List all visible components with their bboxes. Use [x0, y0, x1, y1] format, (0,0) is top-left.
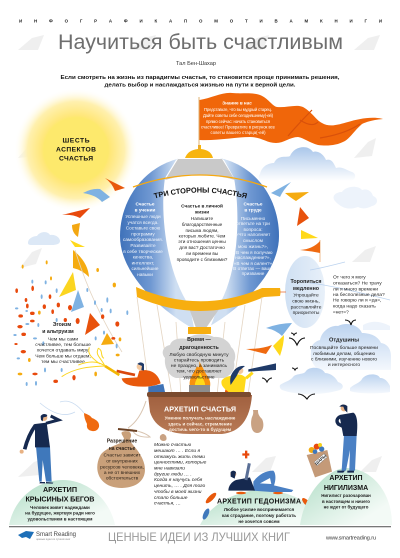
italic quote: мне навязали — [154, 466, 185, 472]
hill: nihilism: Нигилист разочарован — [321, 493, 371, 498]
person: hedonist — [228, 451, 293, 492]
cloud: outlets: Посвящайте больше времени — [310, 344, 378, 351]
hill: nihilism: НИГИЛИЗМА — [324, 485, 368, 492]
sack: permission to be happy: от внутренних — [106, 460, 138, 464]
text: egoism and altruism — [35, 322, 91, 365]
questions text: отказаться? Не трачу — [333, 280, 382, 286]
italic quote: ценностями, которые — [154, 461, 207, 466]
ropes — [75, 250, 262, 395]
column: study: в учении — [135, 208, 155, 212]
logo text — [36, 531, 76, 541]
column: work: «В чем я силен?» — [234, 261, 273, 266]
italic quote: ценить, … . Для того — [154, 483, 206, 489]
column: personal life: Счастье в личной — [181, 202, 223, 208]
column: work: «Что наполняет — [236, 232, 271, 237]
birds — [262, 320, 356, 399]
hill: rat race — [9, 480, 115, 525]
hill: nihilism: АРХЕТИП — [329, 475, 363, 482]
column: work — [233, 202, 273, 276]
text: egoism and altruism: Эгоизм — [53, 322, 71, 328]
questions text: когда надо сказать — [333, 304, 376, 310]
gray cloud: time is precious: Время — — [187, 337, 212, 343]
sack: permission to be happy: ресурсов человека, — [100, 466, 144, 470]
italic quote: счастья, … — [154, 502, 181, 507]
basket: archetype of happiness: здесь и сейчас, стремление — [168, 420, 232, 426]
column: work: Письменно — [241, 216, 266, 221]
column: personal life: эти отношения ценны — [178, 239, 226, 244]
basket: archetype of happiness: Умение получать наслаждение — [165, 416, 236, 420]
column: work: смыслом — [243, 238, 263, 243]
italic quote: Можно счастью — [154, 442, 191, 448]
author: Тал Бен-Шахар — [176, 61, 216, 67]
sun: six aspects — [14, 88, 138, 212]
column: personal life — [177, 202, 228, 262]
top label: И Н Ф О Г Р А Ф И К А П О М О Т И В А М К Н И Г И — [19, 18, 382, 24]
column: work: В ответах — ваше — [233, 266, 273, 271]
gray cloud: time is precious — [163, 334, 235, 397]
small flags and ellipse: hurry slowly — [246, 240, 390, 356]
column: work: в труде — [244, 208, 262, 212]
box with balls: ШАРЫ — [314, 453, 327, 466]
sack: permission to be happy: Счастье зависит — [103, 452, 141, 458]
hill: rat race: на будущее, жертвуя ради него — [25, 510, 95, 516]
column: personal life: письма людям, — [185, 228, 219, 233]
column: work: ответьте на три — [236, 221, 270, 226]
title: Научиться быть счастливым — [58, 30, 343, 54]
hill: hedonism: как страдание, поэтому работать — [222, 512, 296, 518]
text: egoism and altruism: Чем мы сами — [48, 336, 78, 342]
logo icon — [18, 531, 34, 539]
column: personal life: ли времени вы — [186, 251, 219, 256]
burner — [189, 385, 210, 397]
italic quote: другие люди … . — [154, 471, 192, 477]
person with telescope — [221, 363, 276, 397]
column: study: Составьте свою — [126, 226, 161, 231]
hill: rat race: удовольствием в настоящем — [28, 516, 93, 522]
column: study: учатся всегда. — [127, 220, 159, 225]
cloud: outlets: с близкими, изучению нового — [311, 356, 377, 362]
column: work: наслаждение?», — [235, 255, 271, 260]
column: personal life: для вас? Достаточно — [179, 245, 225, 250]
column: study: Развивайте — [130, 242, 156, 248]
gray cloud: time is precious: тем, что доставляет — [176, 370, 223, 374]
italic quote: Когда я научусь себя — [154, 477, 203, 483]
questions text: на бесполезные дела? — [333, 292, 385, 298]
text: egoism and altruism: счастливее, тем больше — [35, 342, 91, 348]
balloon band — [136, 287, 280, 311]
footer url: www.smartreading.ru — [325, 536, 376, 542]
intro text — [60, 75, 340, 88]
basket: archetype of happiness — [147, 392, 263, 441]
questions text: Не говорю ли я «да», — [333, 298, 381, 304]
column: personal life: которых любите. Чем — [179, 234, 225, 239]
hill: rat race: АРХЕТИП — [43, 485, 77, 494]
italic quote: чтобы в моей жизни — [154, 488, 202, 495]
hill: nihilism: в настоящем и ничего — [322, 499, 370, 504]
column: personal life: благодарственные — [182, 222, 223, 227]
italic quote: мешают … . Если я — [154, 448, 200, 454]
flag: knowledge within: Представьте, что вы мудрый старец. — [204, 107, 272, 112]
cloud: outlets — [280, 322, 391, 394]
logo text: ценные идеи из лучших книг — [36, 538, 70, 541]
sack: permission to be happy: Разрешение — [107, 438, 137, 444]
column: study — [123, 202, 163, 277]
balloon envelope — [120, 156, 279, 328]
questions text: От чего я могу — [333, 274, 366, 280]
sack: permission to be happy: обстоятельств — [106, 476, 139, 482]
text: egoism and altruism: Чем больше мы отдаем, — [35, 354, 91, 360]
column: study: интеллект, — [132, 260, 154, 265]
column: study: Успешные люди — [125, 214, 161, 219]
hill: hedonism — [200, 490, 327, 525]
clouds upper — [28, 147, 377, 245]
intro text: делать выбор и наслаждаться жизнью на пути к верной цели. — [104, 82, 296, 88]
column: study: Счастье — [135, 202, 155, 206]
party popper streamers — [62, 347, 105, 377]
small flags and ellipse: hurry slowly: медленно — [293, 286, 320, 292]
balloon heading: ТРИ СТОРОНЫ СЧАСТЬЯ — [154, 187, 248, 198]
person with party popper — [105, 362, 166, 397]
hill: hedonism: Любое усилие воспринимается — [224, 506, 295, 512]
italic quote: стало больше — [154, 495, 188, 501]
questions text — [333, 274, 385, 316]
questions text: «нет»? — [333, 310, 349, 316]
column: study: в себе творческие — [123, 249, 163, 254]
small flags and ellipse: hurry slowly: свою жизнь, — [292, 300, 320, 304]
small flags and ellipse: hurry slowly: Упрощайте — [293, 292, 319, 298]
flag: knowledge within: советы вашего старца(-ей) — [210, 130, 266, 135]
box with balls — [307, 443, 332, 477]
cloud: outlets: любимым делам, общению — [313, 351, 375, 357]
hill: nihilism: не ждет от будущего — [324, 504, 369, 510]
watermark logos — [18, 35, 382, 477]
small flags and ellipse: hurry slowly: Торопиться — [291, 279, 321, 285]
gray cloud: time is precious: старайтесь проводить — [174, 356, 225, 364]
gray cloud: time is precious: удовольствие — [183, 376, 215, 380]
column: personal life: жизни — [194, 210, 209, 214]
intro text: Если смотреть на жизнь из парадигмы счастья, то становится проще принимать решения, — [60, 75, 340, 81]
pennants left — [59, 178, 125, 345]
flag: knowledge within: прямо сейчас: начать становиться — [206, 119, 270, 124]
balloon — [120, 145, 280, 334]
text: egoism and altruism: и альтруизм — [42, 329, 74, 335]
logo text: Smart Reading — [36, 531, 76, 538]
gray cloud: time is precious: драгоценность — [179, 345, 219, 351]
footer divider — [9, 526, 391, 527]
column: work: мою жизнь?», — [238, 244, 268, 249]
footer slogan: ЦЕННЫЕ ИДЕИ ИЗ ЛУЧШИХ КНИГ — [108, 530, 290, 544]
sun: six aspects: АСПЕКТОВ — [56, 146, 96, 154]
gray cloud: time is precious: не праздно, а занимаясь — [171, 364, 228, 369]
hill: hedonism: не хочется совсем — [238, 519, 280, 524]
cloud: outlets: и интересного — [328, 363, 360, 368]
column: work: вопроса: — [243, 227, 263, 232]
basket: archetype of happiness: достичь чего-то в будущем — [169, 426, 232, 432]
balloon top cap — [185, 145, 213, 158]
small flags and ellipse: hurry slowly: расставляйте — [291, 304, 322, 310]
person: rat race — [20, 414, 59, 484]
column: study: сильнейшие — [132, 265, 159, 271]
italic quote: откажусь жить теми — [154, 455, 205, 460]
balloon neck — [188, 327, 211, 334]
column: study: самообразования. — [123, 237, 163, 242]
column: study: качества, — [133, 255, 153, 260]
orange cloud blob — [84, 413, 99, 431]
confetti — [13, 260, 128, 386]
flag: knowledge within — [199, 93, 383, 150]
hill: rat race: КРЫСИНЫХ БЕГОВ — [26, 494, 94, 504]
sun: six aspects: ШЕСТЬ — [62, 138, 90, 144]
flag: knowledge within: счастливее! Превратите в рисунок все — [201, 124, 276, 130]
sun: six aspects: СЧАСТЬЯ — [59, 156, 93, 162]
basket: archetype of happiness: АРХЕТИП СЧАСТЬЯ — [164, 404, 236, 414]
small sack left — [160, 434, 167, 441]
sack: permission to be happy — [97, 401, 150, 488]
column: personal life: проводите с близкими? — [177, 257, 228, 262]
small flags and ellipse: hurry slowly: приоритеты — [293, 311, 320, 316]
questions text: ли я много времени — [333, 287, 378, 292]
sack: permission to be happy: а не от внешних — [104, 471, 141, 476]
hill: rat race: Человек живет надеждами — [30, 505, 90, 510]
burner flame — [190, 361, 210, 387]
italic quote — [154, 442, 207, 507]
gray cloud: time is precious: Любую свободную минуту — [169, 352, 229, 358]
cloud: outlets: Отдушины — [329, 338, 359, 344]
pennants right of balloon — [271, 182, 318, 239]
text: egoism and altruism: хочется отдавать миру. — [37, 348, 89, 354]
flag: knowledge within: Знание в нас — [222, 100, 252, 106]
hill: hedonism: АРХЕТИП ГЕДОНИЗМА — [217, 498, 301, 506]
person: nihilist — [337, 404, 357, 473]
flag: knowledge within: Дайте советы себе сегодняшнему(-ей) — [203, 113, 274, 118]
column: personal life: Напишите — [191, 216, 214, 221]
small sack right — [251, 410, 263, 433]
column: work: призвание — [242, 271, 265, 276]
column: study: программу — [131, 231, 155, 236]
column: study: навыки — [137, 272, 153, 277]
hill: nihilism — [300, 468, 392, 525]
text: egoism and altruism: тем мы счастливее — [41, 360, 85, 365]
sack: permission to be happy: на счастье — [109, 446, 136, 452]
column: work: Счастье — [243, 202, 263, 206]
column: work: «В чем я получаю — [233, 250, 273, 255]
